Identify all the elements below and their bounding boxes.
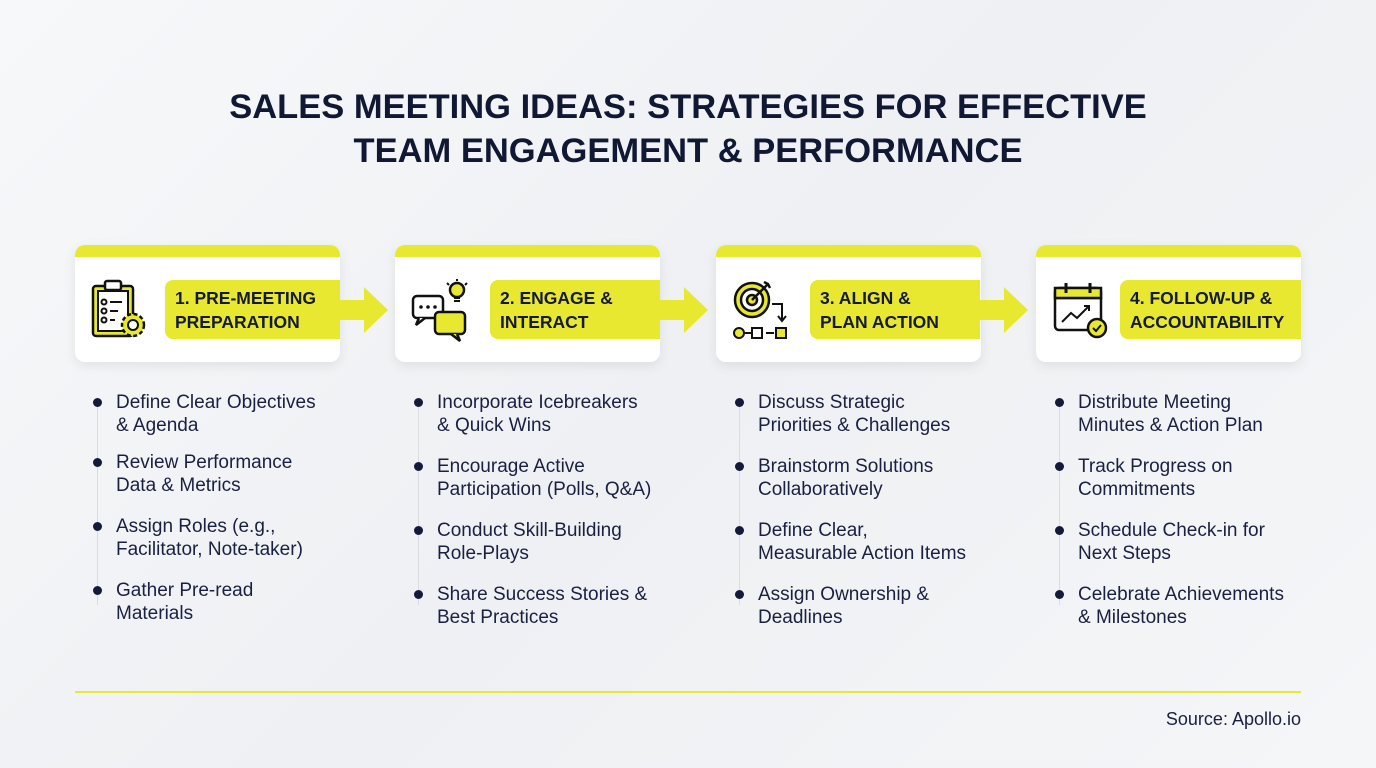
bullets: step 2	[418, 405, 419, 605]
icon: chat bulb	[412, 279, 468, 342]
text: Share Success Stories &	[437, 584, 647, 605]
panel: step 4 card	[1036, 245, 1301, 362]
source: Source: Apollo.io	[1166, 709, 1301, 729]
text: Review Performance	[116, 452, 292, 473]
label: step 2 heading	[490, 280, 660, 339]
text: Priorities & Challenges	[758, 415, 950, 436]
text: Facilitator, Note-taker)	[116, 539, 303, 560]
text: Collaboratively	[758, 479, 883, 500]
label: step 2 heading: INTERACT	[500, 312, 588, 332]
bullets: step 1	[97, 405, 98, 605]
icon: clipboard gear	[92, 280, 146, 338]
text: Gather Pre-read	[116, 580, 253, 601]
panel: step 3 card	[716, 245, 981, 362]
text: Define Clear,	[758, 520, 868, 541]
text: Define Clear Objectives	[116, 392, 316, 413]
label: step 3 heading	[810, 280, 980, 339]
label: step 3 heading: 3. ALIGN &	[820, 288, 911, 308]
text: Encourage Active	[437, 456, 585, 477]
text: Schedule Check-in for	[1078, 520, 1265, 541]
text: Next Steps	[1078, 543, 1171, 564]
icon: calendar chart check	[1054, 283, 1108, 338]
text: Brainstorm Solutions	[758, 456, 933, 477]
label: step 1 heading: 1. PRE-MEETING	[175, 288, 316, 308]
text: Role-Plays	[437, 543, 529, 564]
panel: step 2 card	[395, 245, 660, 362]
icon: target flow	[733, 280, 787, 339]
text: & Quick Wins	[437, 415, 551, 436]
text: Incorporate Icebreakers	[437, 392, 638, 413]
title	[229, 88, 1147, 170]
text: Data & Metrics	[116, 475, 241, 496]
bullets: step 3	[739, 405, 740, 605]
text: Measurable Action Items	[758, 543, 966, 564]
label: step 2 heading: 2. ENGAGE &	[500, 288, 613, 308]
text: Minutes & Action Plan	[1078, 415, 1263, 436]
text: Commitments	[1078, 479, 1195, 500]
text: Deadlines	[758, 607, 842, 628]
text: & Milestones	[1078, 607, 1187, 628]
label: step 3 heading: PLAN ACTION	[820, 312, 939, 332]
text: Discuss Strategic	[758, 392, 905, 413]
panel: step 1 card	[75, 245, 340, 362]
arrow 3	[980, 287, 1028, 333]
text: Assign Roles (e.g.,	[116, 516, 275, 537]
label: step 4 heading	[1120, 280, 1301, 339]
label: step 4 heading: 4. FOLLOW-UP &	[1130, 288, 1272, 308]
arrow 1	[340, 287, 388, 333]
bullets: step 4	[1059, 405, 1060, 605]
text: Assign Ownership &	[758, 584, 929, 605]
text: Materials	[116, 603, 193, 624]
text: Participation (Polls, Q&A)	[437, 479, 651, 500]
arrow 2	[660, 287, 708, 333]
label: step 1 heading	[165, 280, 340, 339]
label: step 4 heading: ACCOUNTABILITY	[1130, 312, 1284, 332]
text: Celebrate Achievements	[1078, 584, 1284, 605]
label: step 1 heading: PREPARATION	[175, 312, 300, 332]
text: & Agenda	[116, 415, 198, 436]
text: Distribute Meeting	[1078, 392, 1231, 413]
title: SALES MEETING IDEAS: STRATEGIES FOR EFFECTIVE	[229, 88, 1147, 126]
text: Track Progress on	[1078, 456, 1233, 477]
title: TEAM ENGAGEMENT & PERFORMANCE	[354, 132, 1022, 170]
text: Best Practices	[437, 607, 558, 628]
text: Conduct Skill-Building	[437, 520, 622, 541]
